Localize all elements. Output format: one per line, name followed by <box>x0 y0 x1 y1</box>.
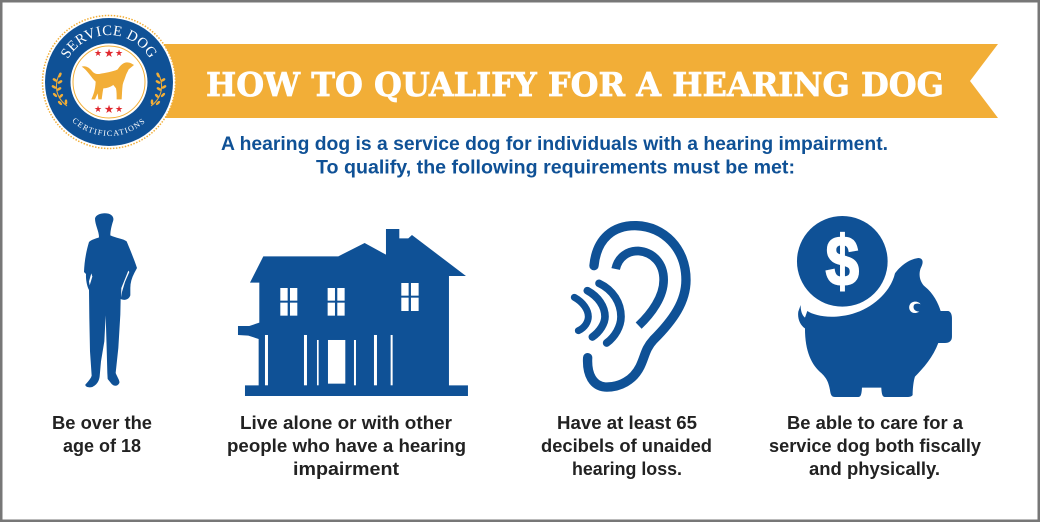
windows <box>265 283 419 385</box>
badge: service dog certifications: ★ <box>115 48 123 58</box>
banner ribbon <box>160 44 998 118</box>
caption: care: Be able to care for a <box>787 412 964 433</box>
badge: service dog certifications <box>42 14 176 150</box>
intro text <box>221 133 888 178</box>
caption: care <box>769 412 982 479</box>
caption: care: and physically. <box>809 458 940 479</box>
icon: ear with sound waves <box>574 226 686 387</box>
caption: hearing loss: Have at least 65 <box>557 412 697 433</box>
badge: service dog certifications: ★ <box>94 48 102 58</box>
icon: person silhouette <box>84 213 137 387</box>
intro text: To qualify, the following requirements must be met: <box>316 156 795 178</box>
icon: right laurel <box>151 72 167 106</box>
icon: piggy bank with coin <box>797 216 952 397</box>
caption: hearing loss <box>541 412 712 479</box>
badge: service dog certifications: ★ <box>104 104 114 116</box>
title: HOW TO QUALIFY FOR A HEARING DOG <box>206 65 944 104</box>
caption: age: age of 18 <box>63 435 141 456</box>
caption: hearing loss: hearing loss. <box>572 458 682 479</box>
badge: service dog certifications: CERTIFICATIONS <box>72 118 144 136</box>
badge: service dog certifications: ★ <box>104 48 114 60</box>
icon: left laurel <box>51 72 67 106</box>
caption: age <box>52 412 152 456</box>
badge: service dog certifications: SERVICE DOG <box>61 26 157 58</box>
caption: care: service dog both fiscally <box>769 435 982 456</box>
caption: home: impairment <box>293 458 399 479</box>
caption: home <box>227 412 466 479</box>
caption: home: Live alone or with other <box>240 412 452 433</box>
badge: service dog certifications: ★ <box>115 104 123 114</box>
badge: service dog certifications: ★ <box>94 104 102 114</box>
caption: home: people who have a hearing <box>227 435 466 456</box>
icon: house <box>238 229 468 396</box>
icon: dog silhouette <box>82 62 134 99</box>
intro text: A hearing dog is a service dog for individuals with a hearing impairment. <box>221 133 888 155</box>
caption: hearing loss: decibels of unaided <box>541 435 712 456</box>
caption: age: Be over the <box>52 412 152 433</box>
icon: piggy bank with coin: $ <box>826 222 859 300</box>
